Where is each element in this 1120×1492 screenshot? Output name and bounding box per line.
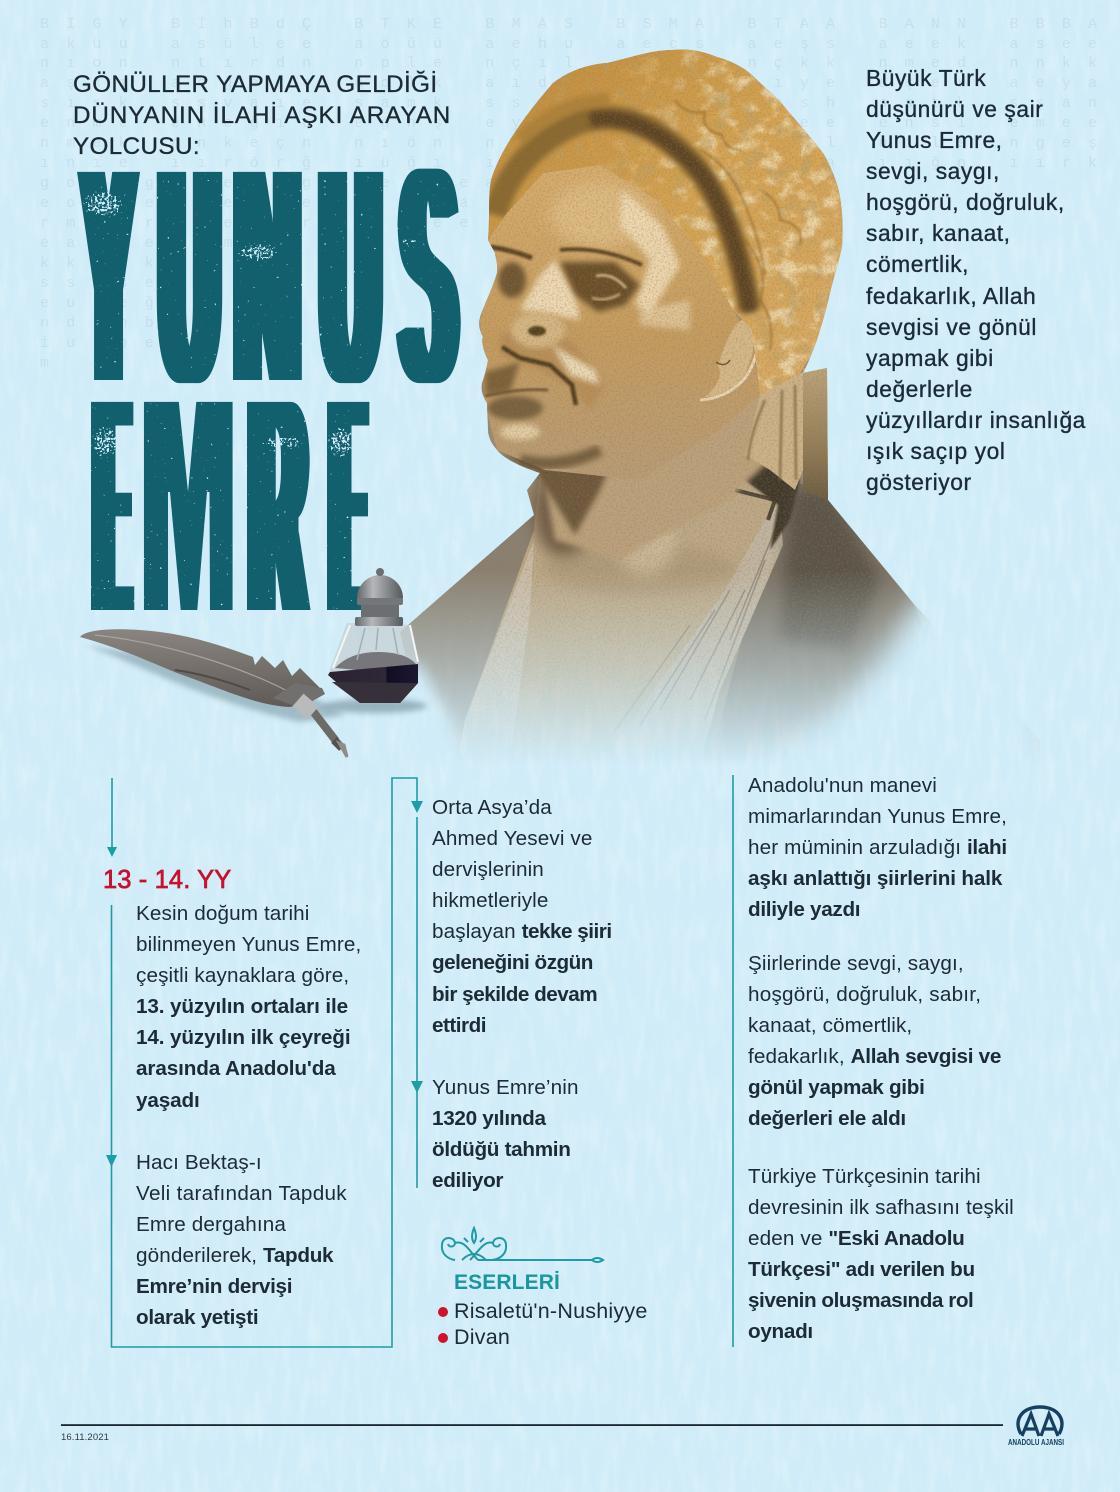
faint background letters: BIGY BİhBdÇ BTKE BMAS BSMA BTAA BANN BBBA [40,15,1114,33]
title: YUNUS EMRE: M [146,327,230,685]
Anadolu Ajansi logo: ANADOLU AJANSI [1008,1437,1064,1447]
text: Tapduk Emre: Emre’nin dervişi [136,1275,292,1298]
ear [700,318,757,400]
text: death: 1320 yılında [432,1107,546,1130]
text: values: değerleri ele aldı [748,1107,906,1130]
title: YUNUS EMRE: Y [83,97,134,455]
footer rule [61,1424,1003,1426]
text: death: ediliyor [432,1169,503,1192]
text: values: kanaat, cömertlik, [748,1014,912,1037]
faint background letters: m n [40,355,119,372]
list text: Risaletü'n-Nushiyye [454,1299,648,1323]
text: spiritual architects: aşkı anlattığı şiirlerini halk [748,867,1002,890]
title: YUNUS EMRE: U [322,98,379,455]
text: spiritual architects: her müminin arzuladığı ilahi [748,836,1007,859]
heading: DÜNYANIN İLAHİ AŞKI ARAYAN [73,102,451,129]
faint background letters: aşkı aeğeke aolk aıdı aşan aıye aşer aeya [40,75,1114,92]
text: values: hoşgörü, doğruluk, sabır, [748,983,981,1006]
intro text block: ışık saçıp yol [866,438,1005,464]
text: Tapduk Emre: olarak yetişti [136,1306,258,1329]
hanging turban cloth [745,368,828,500]
text: Old Anatolian Turkish: devresinin ilk safhasını teşkil [748,1196,1014,1219]
text: birth: yaşadı [136,1089,200,1112]
text: Old Anatolian Turkish: oynadı [748,1320,813,1343]
title: YUNUS EMRE: N [236,97,299,454]
heading: YOLCUSU: [73,133,200,160]
text: values [748,952,1001,1130]
intro text block: fedakarlık, Allah [866,283,1036,309]
text: tekke poetry: Orta Asya’da [432,796,552,819]
heading: GÖNÜLLER YAPMAYA GELDİĞİ [73,71,438,98]
ink bottle [328,568,418,703]
text: Old Anatolian Turkish [748,1165,1014,1343]
faint background letters: sısk ssvaıe samk ssım ssed sssh sstk sşan [40,95,1114,112]
text: tekke poetry: ettirdi [432,1014,486,1037]
arrowheads [106,801,423,1167]
list text [454,1299,648,1349]
works heading: ESERLERİ [454,1271,560,1294]
text: Tapduk Emre: Hacı Bektaş-ı [136,1151,262,1174]
date label: 13-14. YY: 13 - 14. YY [103,866,231,894]
intro text block: cömertlik, [866,251,969,277]
intro text block: sabır, kanaat, [866,220,1011,246]
faint background letters: nmek nnkeçn nıön nlmk nlsn nnıl nıls ngeş [40,135,1114,152]
title: YUNUS EMRE: R [251,328,305,685]
footer date: 16.11.2021 [61,1432,109,1443]
text: Old Anatolian Turkish: Türkiye Türkçesinin tarihi [748,1165,981,1188]
faint background letters: rmn rl eg ran ree [40,215,485,232]
portrait of Yunus Emre [400,50,1040,756]
title: YUNUS EMRE: E [333,328,363,685]
neck [540,380,770,560]
pen nib [273,683,347,757]
text: values: fedakarlık, Allah sevgisi ve [748,1045,1001,1068]
faint background letters: ınıe ıırörğ ıüğı ıiıa ıeık ıika ıığn ıırk [40,155,1114,172]
title: YUNUS EMRE: U [161,98,218,455]
faint background letters: eoa ee ee eeh ena ene [40,195,590,212]
intro text block: sevgi, saygı, [866,158,1000,184]
faint background letters: enme eneğıe eğnş eyen eeıe eeee ensı emee [40,115,1114,132]
faint background letters: aküu asülee aöüü aehu aeçs aeşs aeek asee [40,36,1114,53]
text: birth: 14. yüzyılın ilk çeyreği [136,1026,350,1049]
text: tekke poetry: dervişlerinin [432,858,544,881]
faint background letters: ss se [40,275,171,292]
title: YUNUS EMRE: E [97,328,127,685]
face modelling [485,183,690,463]
text: birth [136,902,361,1112]
feather [80,629,322,707]
text: tekke poetry: Ahmed Yesevi ve [432,827,593,850]
text: death: Yunus Emre’nin [432,1076,579,1099]
intro text block: sevgisi ve gönül [866,314,1037,340]
intro text block: Yunus Emre, [866,127,1003,153]
text: Tapduk Emre: Emre dergahına [136,1213,286,1236]
text: tekke poetry [432,796,612,1037]
text: spiritual architects [748,774,1007,921]
text: tekke poetry: geleneğini özgün [432,951,593,974]
faint background letters: iu be [40,335,171,352]
text: death: öldüğü tahmin [432,1138,571,1161]
text: values: Şiirlerinde sevgi, saygı, [748,952,964,975]
text: Old Anatolian Turkish: şivenin oluşmasında rol [748,1289,973,1312]
intro text block: yüzyıllardır insanlığa [866,407,1086,433]
text: Tapduk Emre [136,1151,347,1329]
bullet [438,1333,448,1343]
text: tekke poetry: hikmetleriyle [432,889,549,912]
text: death [432,1076,579,1192]
body and robe [400,50,1040,755]
intro text block [866,65,1086,496]
faint background letters: nıon ntırdn nple nçıl nmek nçkk nmed nnkk [40,55,1114,72]
text: birth: arasında Anadolu'da [136,1057,336,1080]
face [480,165,760,480]
text: Tapduk Emre: Veli tarafından Tapduk [136,1182,347,1205]
faint background letters: eu eğ [40,295,171,312]
text: Tapduk Emre: gönderilerek, Tapduk [136,1244,333,1267]
faint background letters: eam e ema [40,235,276,252]
faint background letters: kkn kk [40,255,197,272]
intro text block: düşünürü ve şair [866,96,1043,122]
bullet [438,1307,448,1317]
intro text block: hoşgörü, doğruluk, [866,189,1065,215]
text: Old Anatolian Turkish: eden ve "Eski Anadolu [748,1227,965,1250]
text: birth: Kesin doğum tarihi [136,902,310,925]
title: YUNUS EMRE: S [402,98,455,455]
list text: Divan [454,1325,510,1349]
text: Old Anatolian Turkish: Türkçesi" adı verilen bu [748,1258,975,1281]
turban [480,40,850,400]
icon: ornament [440,1226,605,1263]
intro text block: gösteriyor [866,469,972,495]
heading [73,70,451,160]
intro text block: Büyük Türk [866,65,986,91]
text: spiritual architects: Anadolu'nun manevi [748,774,937,797]
text: birth: çeşitli kaynaklara göre, [136,964,349,987]
intro text block: değerlerle [866,376,973,402]
text: tekke poetry: başlayan tekke şiiri [432,920,612,943]
text: birth: 13. yüzyılın ortaları ile [136,995,348,1018]
faint background letters: gon gü ea gıle gea gae gea gen [40,175,826,192]
text: birth: bilinmeyen Yunus Emre, [136,933,361,956]
text: spiritual architects: diliyle yazdı [748,898,860,921]
text: spiritual architects: mimarlarından Yunus Emre, [748,805,1007,828]
works list [438,1299,648,1349]
text: values: gönül yapmak gibi [748,1076,925,1099]
text: tekke poetry: bir şekilde devam [432,983,597,1006]
faint background letters: nd nb [40,315,171,332]
intro text block: yapmak gibi [866,345,994,371]
